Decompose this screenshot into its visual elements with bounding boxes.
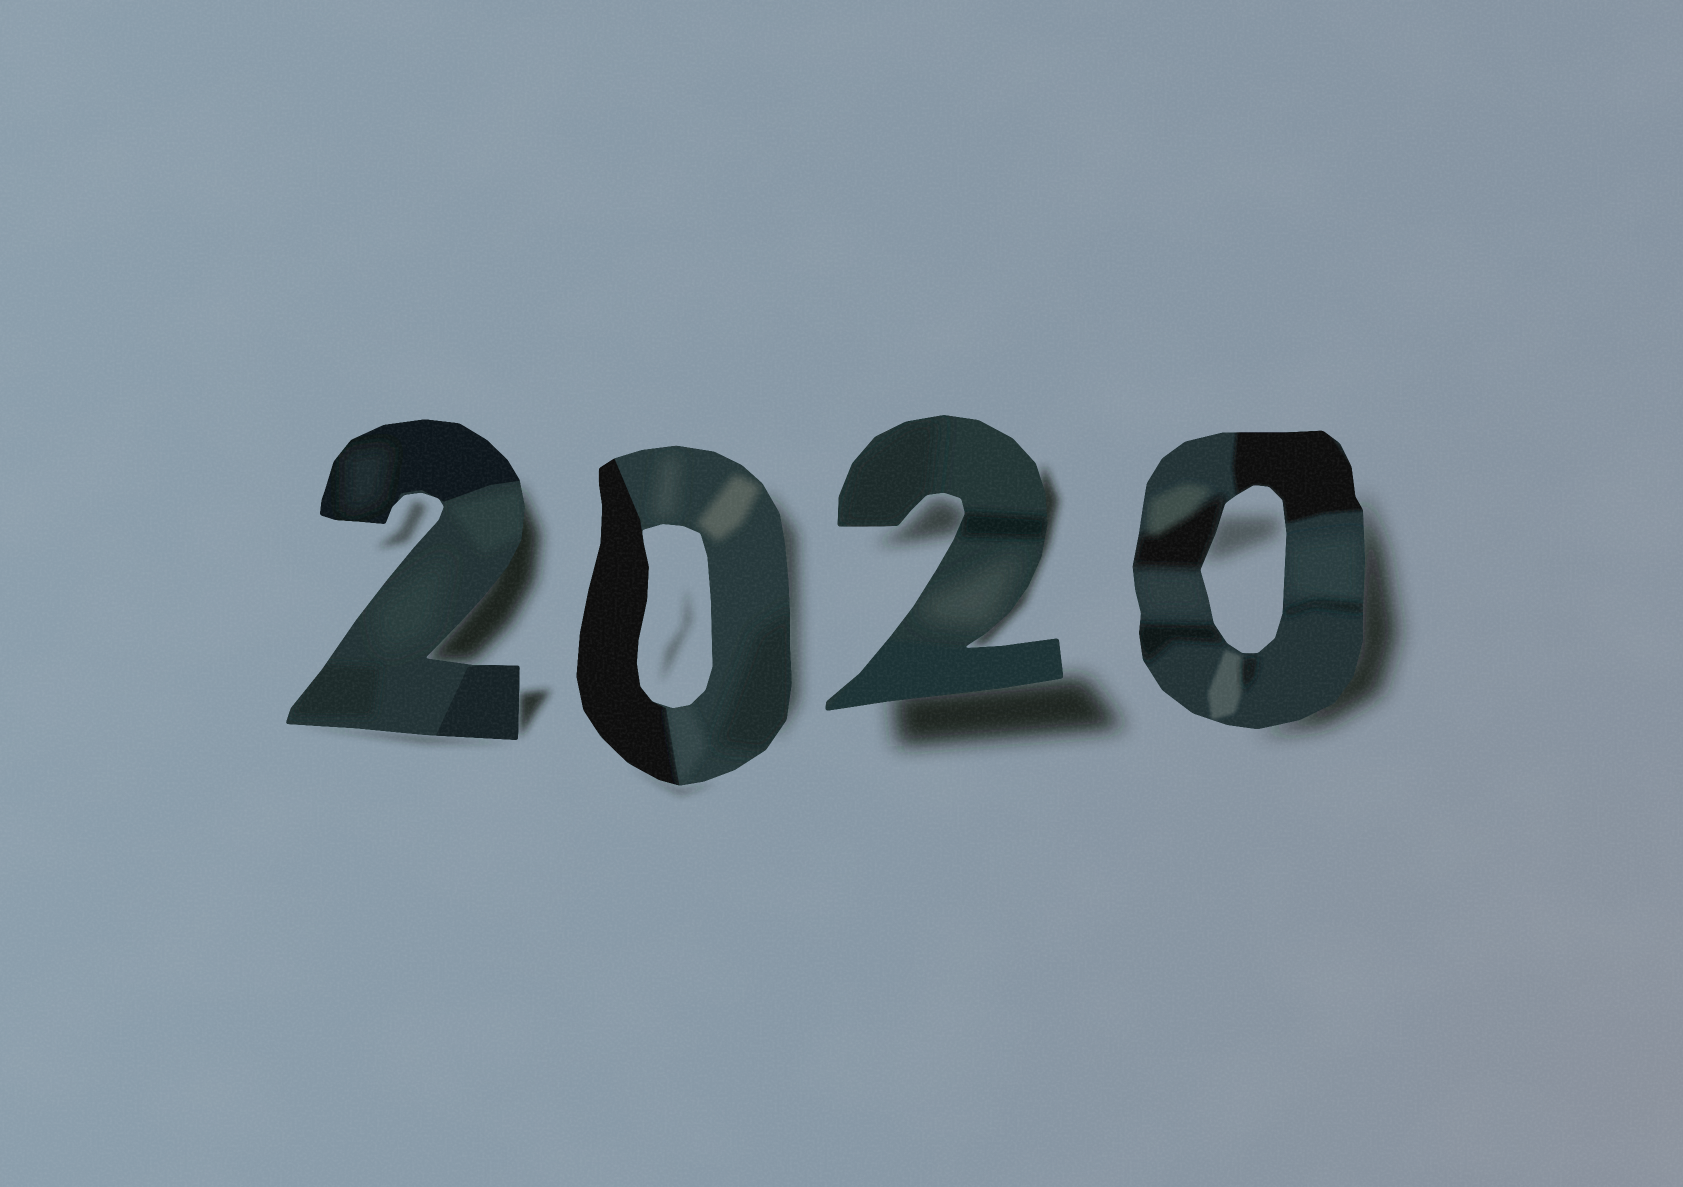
digit: second 2 (826, 415, 1064, 710)
cast shadows beneath the paper numerals (291, 463, 1397, 795)
digit: second 0 (1132, 430, 1365, 729)
digit: first 0 (576, 446, 792, 786)
digit: first 2 (286, 420, 525, 740)
digit: first 2: 2 (291, 342, 540, 826)
numeral 2020 made of cut paper (286, 415, 1365, 786)
digit: second 0: 0 (1116, 359, 1372, 805)
digit: second 2: 2 (821, 334, 1088, 799)
digit: first 0: 0 (566, 375, 815, 859)
